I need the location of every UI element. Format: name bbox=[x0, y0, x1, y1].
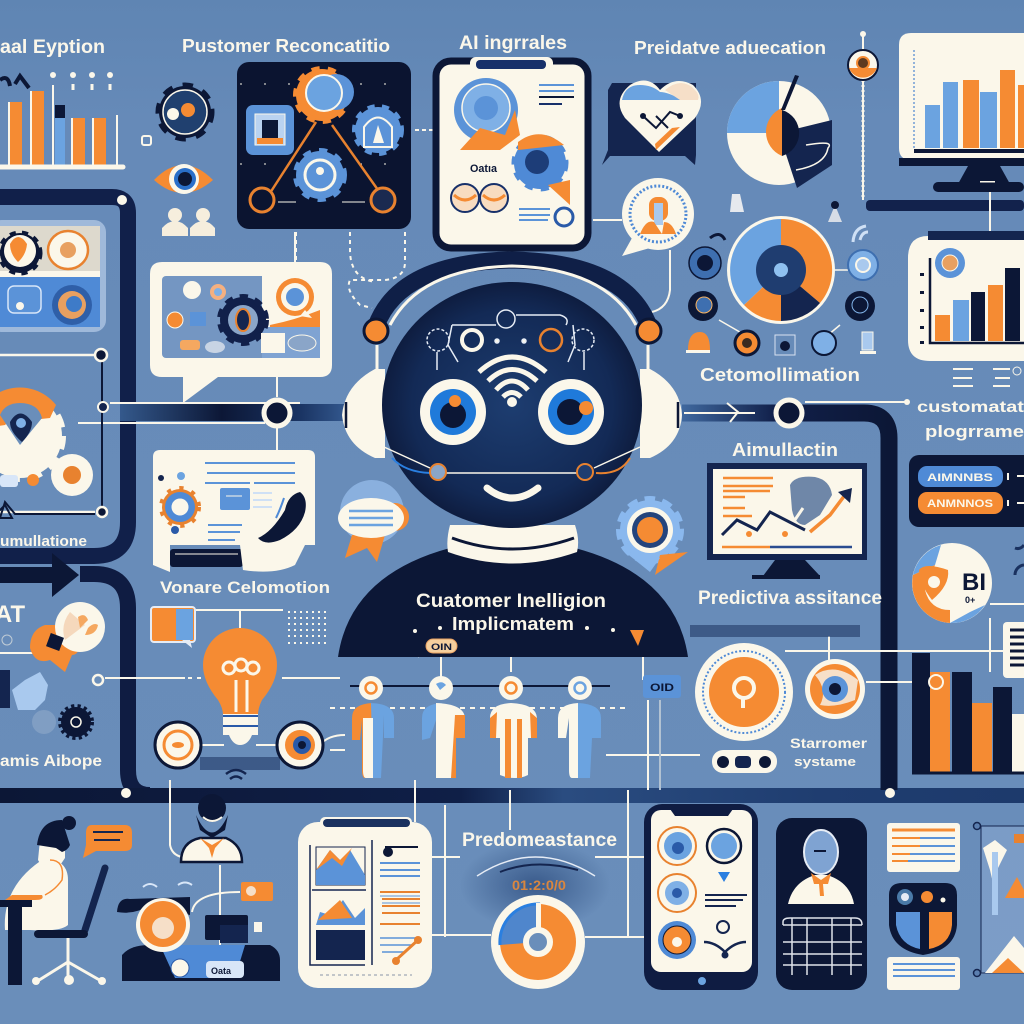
pie chart: top bbox=[727, 75, 832, 188]
heading: top left: aal Eyption bbox=[0, 37, 105, 58]
speech bubble: gear panel bbox=[150, 262, 332, 403]
people connector bbox=[350, 685, 610, 687]
pie chart: centre right with icons bbox=[686, 216, 878, 355]
panel: customer reconciliation bbox=[182, 36, 411, 229]
label: cetomollimation: Cetomollimation bbox=[700, 365, 860, 385]
person with headset bbox=[181, 794, 242, 862]
document: top note bbox=[887, 823, 960, 872]
heading: Predomeastance bbox=[462, 830, 617, 851]
tag: oid: OIN bbox=[431, 642, 452, 652]
monitor: line chart bbox=[707, 463, 867, 579]
hand and phone bbox=[240, 492, 306, 572]
heading: AI ingrrales bbox=[459, 33, 567, 54]
woman body bbox=[5, 816, 76, 930]
panel: AI tablet bbox=[436, 33, 588, 248]
device: orange dial machine bbox=[117, 882, 280, 981]
halftone strips bbox=[200, 625, 860, 770]
label: customatat programme bbox=[917, 399, 1024, 441]
smile bbox=[487, 488, 538, 498]
small icons around pie bbox=[710, 194, 868, 242]
panel: left upper content bbox=[0, 220, 106, 332]
panel: lower left content bbox=[0, 601, 105, 770]
chip: oid bbox=[643, 675, 681, 698]
pill indicator bbox=[712, 750, 777, 773]
label: customatat programme: plogrrame bbox=[925, 422, 1024, 441]
dot grid bbox=[288, 612, 330, 643]
label: starromer systeme bbox=[790, 735, 868, 769]
badge: right of robot bbox=[620, 500, 688, 575]
people row bbox=[352, 676, 601, 778]
icon: circle right bbox=[277, 722, 323, 768]
structural frame bands bbox=[0, 195, 1024, 803]
person 1 bbox=[352, 676, 394, 778]
panel: left lower process bbox=[0, 349, 108, 550]
icon: wifi bbox=[226, 770, 246, 779]
connector node: right bbox=[727, 399, 910, 426]
panel: right bar chart bbox=[908, 231, 1024, 386]
robot body bbox=[338, 542, 688, 657]
icon: light bulb bbox=[203, 628, 277, 745]
person 4 bbox=[558, 676, 601, 778]
tag: oid bbox=[426, 639, 457, 653]
tag: orange bbox=[630, 630, 644, 646]
satellite icons bbox=[686, 247, 878, 355]
icon: orange target bbox=[848, 31, 878, 80]
phone bbox=[644, 804, 758, 990]
chip panel: right bbox=[909, 455, 1024, 527]
icon: heart speech bubble bbox=[602, 81, 701, 165]
monitor: top right bar chart bbox=[899, 33, 1024, 192]
document: barcode bbox=[1003, 622, 1024, 678]
person 2 bbox=[422, 676, 465, 778]
panel: AI tablet: Oatıa bbox=[470, 163, 498, 175]
BI badge: 0+ bbox=[965, 595, 975, 605]
chair bbox=[32, 868, 106, 985]
molecule icon bbox=[158, 472, 198, 534]
BI badge: BI bbox=[962, 569, 986, 596]
robot character: Implicmatem bbox=[452, 614, 574, 634]
chip panel: right: AIMNNBS bbox=[927, 472, 993, 484]
device: orange dial machine: Oata bbox=[211, 966, 232, 976]
label: customatat programme: customatat bbox=[917, 399, 1024, 416]
panel: lower left content: amis Aibope bbox=[0, 753, 102, 770]
donut: predomeastance: 01:2:0/0 bbox=[512, 877, 566, 893]
cheek lines bbox=[384, 447, 640, 480]
wifi icon bbox=[479, 357, 546, 397]
body dots bbox=[413, 626, 615, 633]
panel: right lower chart bbox=[912, 653, 1024, 773]
icon: shield panel bbox=[889, 883, 957, 955]
icon: eye ring bbox=[805, 659, 865, 719]
heading: predictive education: Preidatve aduecation bbox=[634, 38, 826, 58]
arrow: left bbox=[0, 553, 79, 597]
panel: voice automation bbox=[151, 578, 330, 779]
icon: circle left bbox=[155, 722, 201, 768]
panel: profile card bbox=[776, 818, 867, 990]
label: starromer systeme: systame bbox=[794, 754, 856, 769]
right eye bbox=[538, 379, 604, 445]
connector node: left bbox=[264, 400, 290, 426]
desk bbox=[0, 900, 32, 985]
woman at desk bbox=[0, 816, 132, 985]
left eye bbox=[420, 379, 486, 445]
tag icon bbox=[151, 607, 195, 648]
top left bar chart bbox=[0, 37, 123, 167]
icon: crystal chart bbox=[974, 822, 1024, 976]
BI badge bbox=[912, 543, 1024, 623]
label: predictive assistance: Predictiva assitance bbox=[698, 588, 882, 609]
heading: Vonare Celomotion bbox=[160, 578, 330, 597]
chip: oid: OID bbox=[650, 682, 674, 694]
icon: gear bbox=[142, 86, 211, 145]
donut: predomeastance bbox=[460, 830, 617, 989]
icon: orange ring bbox=[695, 643, 793, 741]
body text: Cuatomer Inelligion bbox=[416, 591, 606, 612]
heading: Pustomer Reconcatitio bbox=[182, 36, 390, 56]
panel: left lower process: umullatione bbox=[0, 533, 87, 550]
panel: support card bbox=[153, 450, 315, 572]
icon: people bbox=[162, 208, 215, 236]
icon: eye bbox=[154, 164, 213, 194]
robot collar bbox=[447, 525, 578, 564]
robot character bbox=[338, 260, 688, 657]
chip panel: right: ANMNNOS bbox=[927, 498, 993, 510]
document: bottom note bbox=[887, 957, 960, 990]
label: aimullactin: Aimullactin bbox=[732, 440, 838, 460]
speech bubble: person bbox=[622, 178, 694, 256]
person 3 bbox=[490, 676, 537, 778]
headband bbox=[376, 260, 649, 326]
robot head bbox=[382, 282, 642, 528]
ear cups bbox=[342, 369, 385, 458]
forehead circuit bbox=[427, 310, 594, 370]
speech bubble: blue and orange bbox=[338, 480, 409, 562]
label: starromer systeme: Starromer bbox=[790, 735, 868, 751]
chat bubble bbox=[83, 825, 132, 858]
document: charts report bbox=[298, 817, 432, 988]
